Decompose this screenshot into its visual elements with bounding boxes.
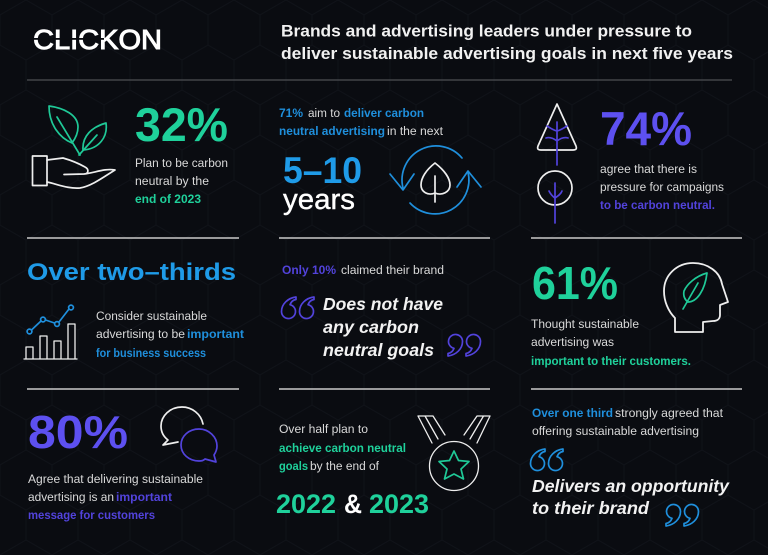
- text: agree there is pressure: pressure for campaigns: [600, 180, 724, 194]
- text: important to customers: important to their customers.: [531, 354, 691, 368]
- text: important message: Agree that delivering sustainable: [28, 472, 203, 486]
- icon: medal: [418, 416, 490, 490]
- text: 71% aim to deliver: aim to: [308, 106, 340, 120]
- quote: does not have any carbon neutral goals: [323, 294, 443, 360]
- text: agree there is pressure: [600, 162, 724, 212]
- text: important message: advertising is an: [28, 490, 114, 504]
- text: important message: important: [116, 490, 172, 504]
- icon: hand holding leaves: [32, 106, 115, 188]
- text: 71% aim to deliver: neutral advertising: [279, 124, 385, 138]
- text: agree there is pressure: agree that there is: [600, 162, 697, 176]
- stat: 61%: 61%: [532, 257, 618, 309]
- text: only 10% claimed: claimed their brand: [341, 263, 444, 277]
- icon: bar chart with trend line: [24, 305, 77, 359]
- text: over half plan: achieve carbon neutral: [279, 441, 406, 455]
- icon: opening quote: [281, 297, 314, 319]
- icon: closing quote: [666, 504, 699, 526]
- panel: 32% carbon neutral by 2023: [32, 98, 228, 206]
- panel: over one third: [530, 406, 730, 526]
- panel: 80%: [28, 406, 217, 522]
- text: plan to be carbon neutral: end of 2023: [135, 192, 201, 206]
- text: 71% aim to deliver: 71%: [279, 106, 303, 120]
- icon: trees: [538, 104, 576, 223]
- text: over one third: Over one third: [532, 406, 613, 420]
- text: plan to be carbon neutral: neutral by the: [135, 174, 209, 188]
- icon: head with leaf: [664, 263, 728, 332]
- text: plan to be carbon neutral: Plan to be carbon: [135, 156, 228, 170]
- text: over half plan: Over half plan to: [279, 422, 368, 436]
- panel: 71% 5-10 years: [279, 106, 481, 216]
- text: important message: message for customers: [28, 508, 155, 522]
- panel: 74% pressure: [538, 102, 724, 223]
- text: important message: [28, 472, 203, 522]
- quote: delivers an opportunity: [532, 476, 730, 518]
- stat: 2022 & 2023: [276, 489, 429, 519]
- text: business success: for business success: [96, 346, 206, 360]
- text: business success: important: [187, 327, 244, 341]
- panel: over half: [276, 416, 490, 519]
- quote: delivers an opportunity: to their brand: [532, 498, 649, 518]
- icon: speech bubbles: [161, 407, 217, 462]
- quote: delivers an opportunity: Delivers an opportunity: [532, 476, 730, 496]
- title: deliver sustainable advertising goals in next five years: [281, 44, 733, 63]
- stat: 80%: 80%: [28, 406, 128, 458]
- text: important to customers: Thought sustainable: [531, 317, 639, 331]
- text: important to customers: advertising was: [531, 335, 614, 349]
- text: over one third: offering sustainable advertising: [532, 424, 699, 438]
- text: business success: advertising to be: [96, 327, 185, 341]
- icon: closing quote: [448, 334, 481, 356]
- text: over half plan: goals: [279, 459, 308, 473]
- logo: Clickon: CLICKON: [33, 24, 162, 55]
- stat: 74%: 74%: [600, 102, 692, 155]
- stat: 2022 & 2023: 2023: [369, 489, 429, 519]
- stat: 32%: 32%: [135, 98, 228, 151]
- text: over one third: strongly agreed that: [615, 406, 724, 420]
- stat: 2022 & 2023: 2022: [276, 489, 336, 519]
- text: 71% aim to deliver: in the next: [387, 124, 444, 138]
- text: business success: [96, 309, 244, 360]
- text: over half plan: [279, 422, 406, 473]
- stat: 2022 & 2023: &: [344, 489, 362, 519]
- text: plan to be carbon neutral: [135, 156, 228, 206]
- text: 71% aim to deliver: deliver carbon: [344, 106, 424, 120]
- panel: over two-thirds: [24, 259, 244, 360]
- title: Brands and advertising leaders under pressure to: [281, 22, 692, 40]
- stat: 5-10 years: years: [283, 184, 355, 216]
- quote: does not have any carbon neutral goals: any carbon: [323, 317, 419, 337]
- icon: recycling leaf: [390, 146, 481, 214]
- text: business success: Consider sustainable: [96, 309, 207, 323]
- quote: does not have any carbon neutral goals: Does not have: [323, 294, 443, 314]
- panel: only 10%: [281, 263, 481, 360]
- stat: 5-10 years: 5–10: [283, 150, 362, 191]
- text: 71% aim to deliver: [279, 106, 444, 138]
- text: only 10% claimed: [282, 263, 444, 277]
- heading: over two-thirds: Over two–thirds: [27, 259, 236, 286]
- text: important to customers: [531, 317, 691, 368]
- icon: opening quote: [530, 449, 563, 471]
- stat: 5-10 years: [283, 150, 362, 216]
- title: [281, 22, 733, 63]
- quote: does not have any carbon neutral goals: neutral goals: [323, 340, 434, 360]
- panel: 61% customers: [531, 257, 728, 368]
- text: over one third: [532, 406, 724, 438]
- text: only 10% claimed: Only 10%: [282, 263, 336, 277]
- text: agree there is pressure: to be carbon neutral.: [600, 198, 715, 212]
- text: over half plan: by the end of: [310, 459, 380, 473]
